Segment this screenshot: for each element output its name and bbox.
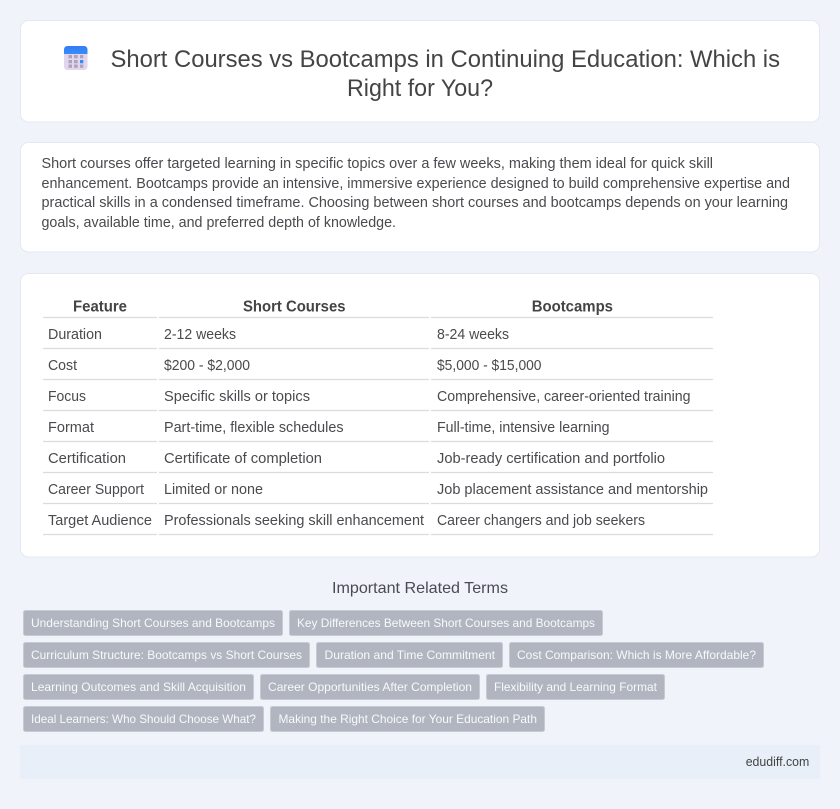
table row: certification: Certificate of completion: [164, 451, 322, 467]
table row: duration: Duration: [48, 327, 102, 343]
tag list: related terms: [24, 610, 764, 732]
text block: introduction: practical skills in a condensed timeframe. Choosing between short courses and bootcamps depends on your learning: [42, 195, 788, 211]
table row: career support: Job placement assistance and mentorship: [437, 482, 708, 498]
tag: Cost Comparison: Which is More Affordable?: [517, 648, 756, 662]
tag: Understanding Short Courses and Bootcamps: [31, 616, 275, 630]
table header: Short Courses: [243, 298, 346, 316]
table row: career support: Career Support: [48, 482, 144, 498]
panel: header: [20, 20, 820, 122]
tag: [486, 674, 664, 700]
table row: format: Full-time, intensive learning: [437, 420, 610, 436]
table row: target audience: Target Audience: [48, 513, 152, 529]
tag: Flexibility and Learning Format: [494, 680, 658, 694]
panel: comparison table: [20, 274, 820, 557]
table row: target audience: Professionals seeking skill enhancement: [164, 513, 424, 529]
table row: cost: [43, 358, 713, 380]
table row: format: [43, 420, 713, 442]
table row: cost: Cost: [48, 358, 77, 374]
tag: [290, 610, 602, 636]
tag: [260, 674, 480, 700]
tag: Curriculum Structure: Bootcamps vs Short Courses: [31, 648, 302, 662]
table row: format: Part-time, flexible schedules: [164, 420, 344, 436]
icon: calendar: [64, 46, 88, 70]
table row: cost: $5,000 - $15,000: [437, 358, 542, 374]
tag: [24, 642, 310, 668]
text block: introduction: enhancement. Bootcamps provide an intensive, immersive experience designed to build comprehensive expertise and: [42, 176, 790, 192]
table row: duration: [43, 327, 713, 348]
tag: Career Opportunities After Completion: [268, 680, 472, 694]
text block: introduction: [42, 156, 790, 231]
table row: focus: [43, 389, 713, 410]
table row: focus: Comprehensive, career-oriented training: [437, 389, 690, 405]
table row: format: Format: [48, 420, 94, 436]
table row: certification: Job-ready certification and portfolio: [437, 451, 665, 467]
table row: certification: Certification: [48, 451, 126, 467]
table row: duration: 2-12 weeks: [164, 327, 236, 343]
heading: important related terms: Important Related Terms: [332, 580, 508, 597]
table row: certification: [43, 451, 713, 472]
title: Short Courses vs Bootcamps in Continuing Education: Which is: [110, 46, 780, 73]
table row: target audience: Career changers and job seekers: [437, 513, 645, 529]
tag: [24, 674, 254, 700]
table row: target audience: [43, 513, 713, 534]
tag: [270, 706, 544, 732]
table row: duration: 8-24 weeks: [437, 327, 509, 343]
table header: Feature: [73, 298, 127, 316]
tag: Key Differences Between Short Courses and Bootcamps: [297, 616, 595, 630]
table header: Bootcamps: [532, 298, 613, 316]
table row: career support: Limited or none: [164, 482, 263, 498]
title: [110, 46, 780, 102]
tag: Learning Outcomes and Skill Acquisition: [31, 680, 246, 694]
table row: focus: Specific skills or topics: [164, 389, 310, 405]
tag: [24, 610, 282, 636]
panel: introduction: [20, 142, 820, 252]
tag: [24, 706, 264, 732]
title: Right for You?: [347, 75, 493, 102]
tag: [316, 642, 502, 668]
footer: [20, 745, 820, 779]
table row: focus: Focus: [48, 389, 86, 405]
tag: Ideal Learners: Who Should Choose What?: [31, 712, 256, 726]
tag: Duration and Time Commitment: [324, 648, 496, 662]
tag: Making the Right Choice for Your Education Path: [278, 712, 537, 726]
table row: cost: $200 - $2,000: [164, 358, 250, 374]
table header: [43, 298, 713, 318]
text block: introduction: Short courses offer targeted learning in specific topics over a few weeks, making them ideal for quick skill: [42, 156, 713, 172]
text block: introduction: goals, available time, and preferred depth of knowledge.: [42, 215, 396, 231]
tag: [510, 642, 764, 668]
table row: career support: [43, 482, 713, 504]
footer: edudiff.com: [746, 754, 809, 769]
